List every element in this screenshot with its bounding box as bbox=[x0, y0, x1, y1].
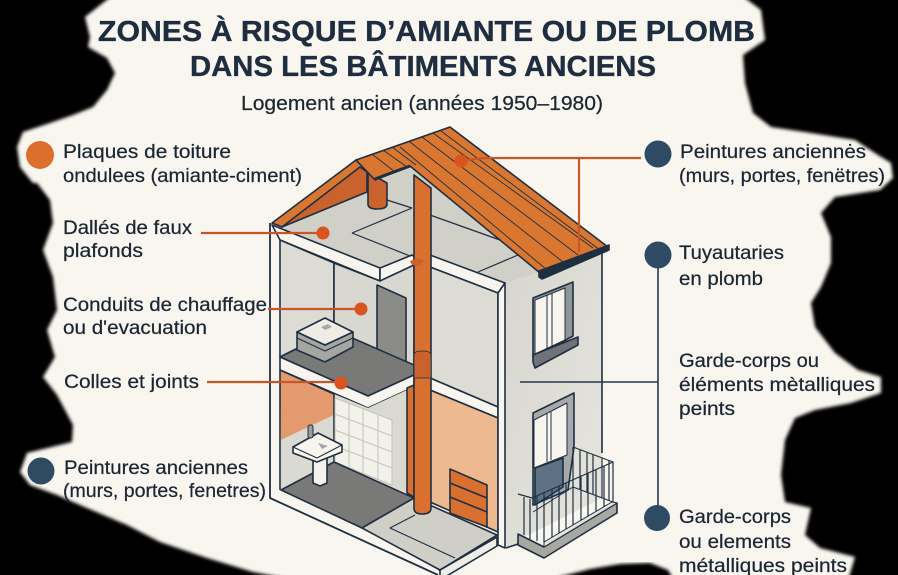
balcony bbox=[518, 447, 617, 558]
subtitle: Logement ancien (années 1950–1980) bbox=[241, 93, 603, 115]
attic floor outline lines bbox=[352, 200, 518, 272]
label: ceiling tiles bbox=[63, 218, 193, 262]
upper room rear wall bbox=[334, 263, 414, 375]
label: railings bottom bbox=[644, 505, 847, 575]
building white shell bbox=[270, 159, 505, 575]
upper floor bbox=[280, 330, 414, 396]
label: railings bottom: Garde-corps bbox=[679, 507, 791, 528]
label: ceiling tiles: plafonds bbox=[63, 241, 143, 262]
pipe collar bbox=[410, 258, 424, 266]
outer left wall and base outline bbox=[270, 223, 497, 575]
label: railings middle bbox=[679, 351, 875, 420]
leader: ceiling tiles bbox=[201, 226, 330, 240]
lower rear wall bbox=[334, 390, 407, 493]
gutter bbox=[539, 245, 609, 279]
box bbox=[297, 332, 353, 362]
label: railings middle: peints bbox=[679, 399, 735, 420]
right upper room wall bbox=[430, 267, 498, 407]
side wall bbox=[505, 250, 602, 548]
label: old paints left: Peintures anciennes bbox=[64, 458, 248, 479]
black torn-edge mask: bottom right bbox=[547, 563, 674, 575]
label: old paints left bbox=[28, 458, 266, 502]
orange door edge bbox=[407, 385, 414, 497]
upper door bbox=[377, 285, 406, 365]
label: roof plates: ondulees (amiante-ciment) bbox=[63, 166, 302, 187]
tiles bbox=[335, 398, 392, 485]
flue stub bbox=[368, 172, 387, 209]
lower grey floor bbox=[281, 462, 414, 528]
label: old paints left: (murs, portes, fenetres) bbox=[63, 481, 266, 502]
label: lead pipes: en plomb bbox=[679, 269, 763, 290]
label: ducts: ou d'evacuation bbox=[63, 318, 207, 339]
radiator bbox=[450, 469, 487, 527]
house illustration bbox=[270, 127, 617, 575]
label: ducts bbox=[63, 295, 267, 339]
label: lead pipes: Tuyautaries bbox=[679, 243, 784, 264]
label: ceiling tiles: Dallés de faux bbox=[63, 218, 193, 239]
lower light floor bbox=[362, 498, 497, 570]
base slab edge bbox=[440, 537, 497, 575]
title bbox=[98, 14, 755, 83]
label: railings bottom: ou elements bbox=[679, 532, 791, 553]
upper floor slab edge bbox=[280, 357, 414, 408]
leader: glues and joints bbox=[207, 376, 348, 390]
title: DANS LES BÂTIMENTS ANCIENS bbox=[190, 49, 656, 83]
main pipe bbox=[414, 175, 431, 514]
attic grey surface bbox=[282, 166, 540, 283]
title: ZONES À RISQUE D’AMIANTE OU DE PLOMB bbox=[98, 14, 755, 48]
label: roof plates: Plaques de toiture bbox=[63, 142, 231, 163]
lower door window bbox=[533, 393, 574, 505]
peach wall bbox=[430, 390, 498, 532]
upper room left wall bbox=[280, 240, 334, 357]
upper window bbox=[533, 282, 573, 358]
gable left bbox=[272, 160, 368, 227]
black torn-edge mask: left bbox=[0, 0, 295, 575]
lower left grey wall bbox=[281, 415, 334, 490]
label: old paints right: (murs, portes, fenëtres) bbox=[679, 166, 885, 187]
right floor band bbox=[430, 378, 498, 418]
label: lead pipes bbox=[644, 242, 784, 290]
leader: lead network bbox=[520, 255, 658, 518]
label: ducts: Conduits de chauffage bbox=[63, 295, 267, 316]
leader: ducts bbox=[268, 302, 368, 316]
ceiling slab right bbox=[430, 255, 505, 293]
roof bbox=[356, 127, 608, 273]
label: old paints right: Peintures anciennės bbox=[680, 142, 866, 163]
label: railings middle: Garde-corps ou bbox=[679, 351, 819, 372]
label: roof plates bbox=[26, 141, 302, 187]
sink bbox=[313, 455, 327, 486]
lower left peach wall bbox=[280, 370, 334, 440]
label: old paints right bbox=[644, 140, 885, 187]
black torn-edge mask: right bbox=[741, 0, 898, 575]
ceiling slab left bbox=[272, 225, 380, 281]
leader: roof plates bbox=[454, 154, 641, 252]
label: railings middle: éléments mètalliques bbox=[679, 375, 875, 396]
label: glues and joints: Colles et joints bbox=[64, 372, 199, 393]
